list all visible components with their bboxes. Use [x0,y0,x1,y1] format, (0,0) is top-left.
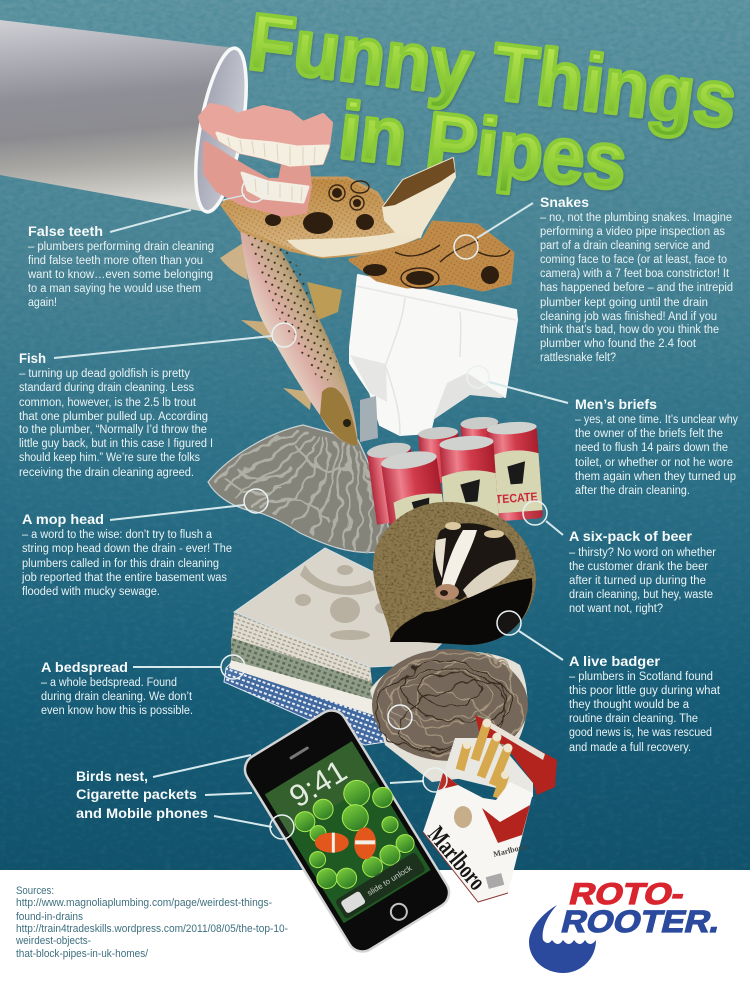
callout markers [221,178,547,839]
icon: cigarette packet [422,715,557,902]
icon: white briefs [350,275,517,435]
text block: mop head: string mop head down the drain - ever! The [22,543,232,555]
text block: live badger: routine drain cleaning. The [569,713,698,725]
sources: http://www.magnoliaplumbing.com/page/weirdest-things- [16,897,272,909]
text block: six-pack of beer: not want not, right? [569,603,663,615]
icon: cigarette packet: Marlboro [422,822,491,896]
text block: false teeth: again! [28,297,57,309]
sources: that-block-pipes-in-uk-homes/ [16,948,149,960]
text block: snakes: performing a video pipe inspection as [540,226,725,238]
text block: snakes: plumber who found the 2.4 foot [540,338,697,350]
text block: men's briefs: the owner of the briefs felt the [575,428,723,440]
sources: http://train4tradeskills.wordpress.com/2011/08/05/the-top-10- [16,923,288,935]
icon: six-pack of beer [366,416,543,535]
icon: birds nest [370,644,528,782]
text block: live badger: they thought would be a [569,699,690,711]
text block: six-pack of beer: after it turned up during the [569,575,706,587]
icon: false teeth [200,105,331,215]
text block: fish: little guy back, but in this case I figured I [19,438,213,450]
text block: mop head: flooded with mucky sewage. [22,586,160,598]
text block: snakes: camera) with a 7 feet boa constrictor! It [540,268,730,280]
text block: six-pack of beer: – thirsty? No word on whether [569,547,716,559]
icon: string mop head [208,396,389,553]
text block: live badger: A live badger [569,653,661,669]
icon: stacked bedspread [224,548,445,745]
text block: fish: should keep him.” We’re sure the folks [19,452,200,464]
logo: Roto-Rooter: ROOTER. [558,904,725,939]
icon: rainbow trout [220,200,358,445]
text block: fish: Fish [19,350,46,366]
text block: snakes: part of a drain cleaning service and [540,240,710,252]
text block: men's briefs: toilet, or whether or not he wore [575,457,733,469]
icon: smartphone [239,704,455,957]
sources: weirdest-objects- [15,935,91,947]
icon: cigarette packet: Marlboro [492,842,527,859]
text block: live badger: – plumbers in Scotland found [569,671,713,683]
text block: mop head [21,511,232,598]
text block: live badger: good news is, he was rescued [569,727,712,739]
text block: birds nest, cigarette packets and mobile phones: Birds nest, [76,768,148,784]
text block: live badger: and made a full recovery. [569,742,691,754]
text block: false teeth: want to know…even some belonging [27,269,213,281]
text block: fish: common, however, is the 2.5 lb trout [19,397,197,409]
text block: six-pack of beer: the customer drank the beer [569,561,708,573]
logo: Roto-Rooter [529,877,725,973]
icon: badger [373,502,536,645]
text block: six-pack of beer [569,528,716,615]
text block: false teeth: – plumbers performing drain cleaning [28,241,214,253]
text block: fish [19,350,213,479]
text block: men's briefs: – yes, at one time. It’s unclear why [575,414,738,426]
sources: found-in-drains [16,911,83,923]
sources: Sources: [16,885,54,897]
text block: men's briefs: Men’s briefs [575,396,657,412]
text block: men's briefs: after the drain cleaning. [575,485,690,497]
text block: fish: that one plumber pulled up. According [19,411,208,423]
sources [15,885,288,960]
text block: false teeth: False teeth [28,223,103,239]
text block: men's briefs: them again when they turned up [575,471,736,483]
text block: snakes: cleaning job was finished! And if you [540,311,717,323]
text block: snakes: has happened before – and the intrepid [540,282,733,294]
text block: mop head: plumbers called in for this drain cleaning [22,558,219,570]
text block: birds nest, cigarette packets and mobile phones [76,768,208,821]
text block: birds nest, cigarette packets and mobile phones: and Mobile phones [76,805,208,821]
text block: six-pack of beer: drain cleaning, but hey, waste [569,589,713,601]
text block: mop head: – a word to the wise: don’t try to flush a [22,529,213,541]
logo: Roto-Rooter: ROTO- [566,877,688,911]
text block: bedspread: even know how this is possible. [41,705,193,717]
title: in Pipes [335,85,631,206]
text block: bedspread: – a whole bedspread. Found [41,677,177,689]
text block: snakes [540,194,733,364]
text block: false teeth: to a man saying he would use them [28,283,201,295]
text block: fish: receiving the drain cleaning agreed. [19,467,194,479]
text block: fish: to the plumber, “Normally I’d throw the [19,424,207,436]
text block: snakes: plumber kept going until the drain [540,297,708,309]
text block: snakes: think that’s bad, how do you think the [540,324,719,336]
text block: mop head: job reported that the entire basement was [21,572,227,584]
text block: bedspread: during drain cleaning. We don’t [41,691,193,703]
text block: snakes: – no, not the plumbing snakes. Imagine [540,212,732,224]
text block: fish: – turning up dead goldfish is pretty [19,368,190,380]
text block: false teeth: find false teeth more often than you [28,255,203,267]
icon: boa snake [222,158,513,290]
text block: bedspread [41,659,193,717]
text block: live badger [569,653,721,754]
text block: bedspread: A bedspread [41,659,128,675]
text block: snakes: coming face to face (or at least, face to [540,254,727,266]
text block: men's briefs: need to flush 14 pairs down the [575,442,728,454]
text block: live badger: this poor little guy during what [569,685,721,697]
text block: fish: standard during drain cleaning. Less [19,382,194,394]
icon: metal pipe [0,20,256,215]
text block: men's briefs [575,396,738,497]
text block: birds nest, cigarette packets and mobile phones: Cigarette packets [76,786,197,802]
icon: smartphone: 9:41 [283,753,353,814]
icon: six-pack of beer: TECATE [495,489,538,506]
leader lines [54,195,568,827]
text block: snakes: rattlesnake felt? [540,352,616,364]
text block: mop head: A mop head [22,511,104,527]
text block: false teeth [27,223,214,309]
icon: smartphone: slide to unlock [366,863,414,898]
text block: six-pack of beer: A six-pack of beer [569,528,693,544]
text block: snakes: Snakes [540,194,589,210]
